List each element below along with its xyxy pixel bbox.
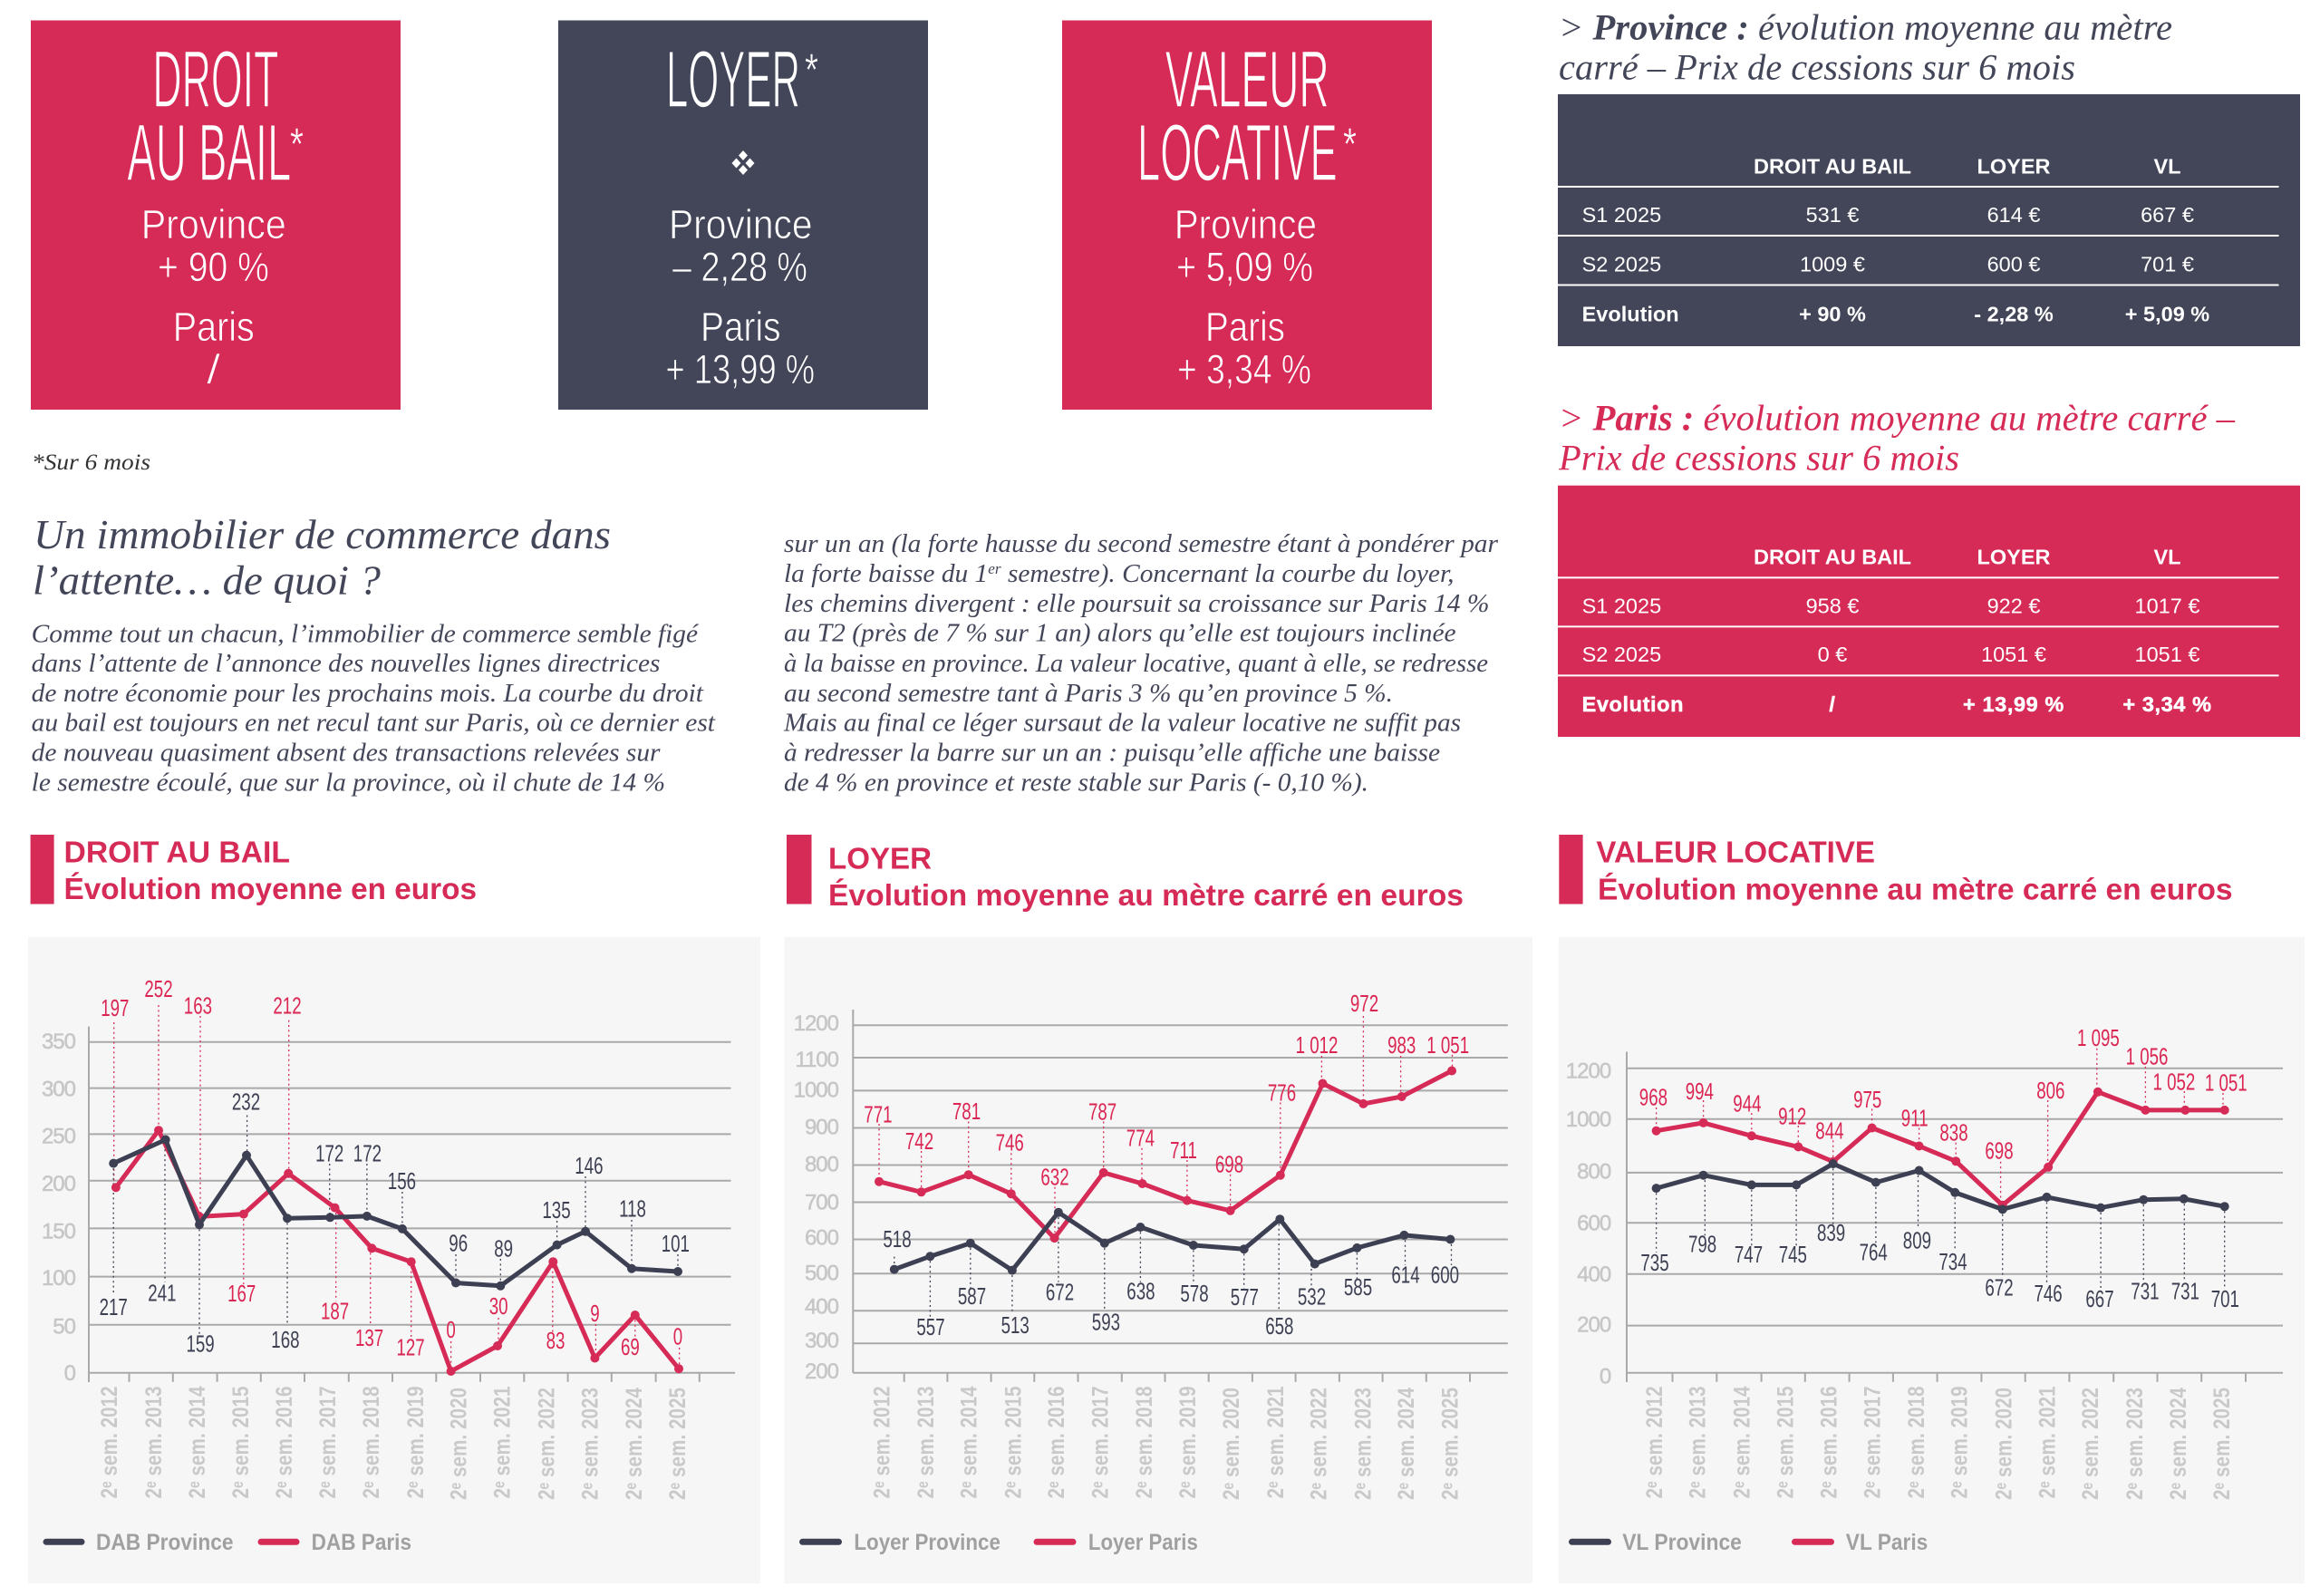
x axis labels: 2ᵉ sem. 2013 (1686, 1387, 1711, 1499)
table: paris: 1017 € (2135, 595, 2199, 618)
heading: province table: > Province : évolution moyenne au mètre (1559, 6, 2172, 47)
table: paris: 922 € (1987, 595, 2040, 618)
table: paris: + 3,34 % (2122, 692, 2212, 716)
table: province: 701 € (2141, 253, 2194, 276)
line series: province (894, 1213, 1450, 1271)
x axis labels: 2ᵉ sem. 2020 (1219, 1388, 1244, 1500)
section heading: droit au bail (31, 835, 477, 905)
section heading: droit au bail: Évolution moyenne en euros (63, 872, 477, 905)
data labels: province: 513 (1001, 1311, 1030, 1339)
card: loyer: Paris (701, 304, 781, 350)
data labels: province: 241 (148, 1279, 177, 1306)
table: paris: / (1829, 692, 1836, 716)
axes and ticks (89, 1027, 735, 1382)
data labels: paris: 0 (446, 1316, 456, 1343)
data labels: paris: 771 (864, 1100, 893, 1127)
x axis labels (1642, 1386, 2235, 1500)
line series: paris (116, 1130, 679, 1371)
data labels: paris (101, 975, 682, 1360)
x axis labels: 2ᵉ sem. 2019 (403, 1387, 429, 1499)
data labels: paris: 806 (2036, 1077, 2064, 1104)
data labels: province: 600 (1431, 1261, 1459, 1288)
leader lines: paris (1657, 1049, 2223, 1205)
card: valeur locative: + 5,09 % (1176, 244, 1313, 290)
legend: DAB Paris (312, 1530, 411, 1555)
x axis labels: 2ᵉ sem. 2015 (1000, 1386, 1026, 1499)
section heading: loyer: Évolution moyenne au mètre carré en euros (828, 878, 1464, 912)
table: province: LOYER (1977, 155, 2050, 179)
y axis labels: 200 (805, 1359, 839, 1384)
data labels: province: 118 (619, 1195, 646, 1222)
data labels: paris: 698 (1985, 1137, 2014, 1164)
x axis labels: 2ᵉ sem. 2022 (1307, 1388, 1332, 1500)
data labels: province: 101 (662, 1230, 690, 1257)
y axis labels: 700 (805, 1190, 839, 1214)
x axis labels: 2ᵉ sem. 2016 (1816, 1387, 1842, 1499)
data labels: province: 672 (1046, 1279, 1074, 1305)
data labels: paris: 983 (1387, 1031, 1416, 1059)
x axis labels (870, 1386, 1463, 1500)
y axis labels: 300 (805, 1329, 839, 1353)
y axis labels: 600 (805, 1226, 839, 1251)
data labels: province: 587 (958, 1282, 986, 1310)
data labels: province: 798 (1688, 1230, 1716, 1257)
card: droit au bail (31, 20, 401, 410)
y axis labels (42, 1030, 76, 1386)
legend (1571, 1530, 1928, 1555)
x axis labels: 2ᵉ sem. 2017 (1088, 1387, 1113, 1499)
data labels: province: 532 (1298, 1282, 1326, 1310)
table: province: 667 € (2141, 203, 2194, 227)
data labels: province: 735 (1640, 1249, 1669, 1276)
data labels: province: 89 (494, 1234, 513, 1262)
data labels: province: 146 (575, 1152, 604, 1179)
table: paris: 958 € (1806, 595, 1859, 618)
data labels: paris: 127 (396, 1333, 425, 1360)
heading: province table (1559, 6, 2172, 87)
table: province: + 5,09 % (2125, 303, 2209, 326)
table: province: - 2,28 % (1974, 303, 2054, 326)
card: droit au bail: DROIT (152, 34, 278, 124)
data labels: province: 168 (271, 1326, 300, 1353)
heading: paris table (1558, 397, 2236, 479)
data labels: paris: 911 (1901, 1104, 1928, 1131)
data labels: province: 172 (315, 1140, 343, 1166)
card: droit au bail: * (290, 119, 304, 169)
x axis labels: 2ᵉ sem. 2021 (1263, 1386, 1289, 1499)
data labels: province: 764 (1860, 1238, 1888, 1265)
data labels: province: 557 (916, 1313, 945, 1340)
data labels: paris: 212 (273, 991, 302, 1019)
data labels: province: 809 (1903, 1226, 1931, 1253)
data labels: paris: 187 (321, 1297, 349, 1324)
y axis labels: 350 (42, 1030, 76, 1054)
y axis labels: 200 (1577, 1313, 1611, 1338)
chart: loyer (785, 937, 1532, 1583)
table: province: VL (2153, 155, 2181, 179)
article text: left column: au bail est toujours en net recul tant sur Paris, où ce dernier est (32, 709, 716, 738)
y axis labels: 1000 (1566, 1108, 1611, 1132)
data labels: paris: 163 (184, 991, 212, 1019)
table: province: 614 € (1987, 203, 2040, 227)
article text: right column: de 4 % en province et reste stable sur Paris (- 0,10 %). (784, 768, 1368, 797)
y axis labels: 0 (64, 1361, 76, 1386)
table: paris: DROIT AU BAIL (1754, 546, 1911, 569)
line series: province (1657, 1164, 2225, 1209)
leader lines: province (113, 1115, 678, 1335)
article text: left column: Comme tout un chacun, l’immobilier de commerce semble figé (32, 619, 699, 648)
footnote: *Sur 6 mois (32, 450, 150, 475)
data labels: province: 731 (2131, 1278, 2160, 1304)
axes and ticks (853, 1010, 1508, 1382)
data labels: paris: 0 (673, 1322, 682, 1349)
axes and ticks (1627, 1051, 2283, 1382)
y axis labels: 600 (1577, 1212, 1611, 1236)
data labels: paris: 1 052 (2152, 1068, 2195, 1095)
legend: VL Province (1622, 1530, 1742, 1555)
x axis labels: 2ᵉ sem. 2020 (1991, 1388, 2016, 1500)
data labels: province (1640, 1219, 2239, 1312)
data labels: paris: 975 (1853, 1086, 1881, 1113)
data labels: province: 96 (449, 1229, 468, 1256)
article text: left column: le semestre écoulé, que sur la province, où il chute de 14 % (32, 768, 665, 797)
y axis labels: 500 (805, 1261, 839, 1285)
card: droit au bail: Province (141, 201, 286, 247)
heading: paris table: > Paris : évolution moyenne au mètre carré – (1559, 397, 2236, 439)
card: droit au bail: Paris (173, 304, 255, 350)
table: paris: 1051 € (2135, 643, 2199, 666)
x axis labels: 2ᵉ sem. 2019 (1175, 1387, 1201, 1499)
y axis labels: 200 (42, 1172, 76, 1196)
table: province: + 90 % (1799, 303, 1866, 326)
x axis labels: 2ᵉ sem. 2018 (1904, 1386, 1929, 1499)
heading: province table: carré – Prix de cessions sur 6 mois (1559, 46, 2075, 87)
y axis labels: 800 (805, 1153, 839, 1176)
x axis labels: 2ᵉ sem. 2025 (2209, 1388, 2235, 1500)
x axis labels: 2ᵉ sem. 2012 (870, 1387, 895, 1499)
x axis labels: 2ᵉ sem. 2022 (2078, 1388, 2103, 1500)
table: province (1558, 94, 2300, 346)
data labels: paris: 83 (546, 1327, 565, 1354)
data labels: paris: 632 (1040, 1163, 1069, 1190)
data labels: paris: 698 (1215, 1150, 1243, 1177)
line series: paris (1657, 1092, 2225, 1205)
data labels: province: 577 (1231, 1283, 1259, 1311)
data labels: paris: 69 (621, 1333, 640, 1360)
x axis labels: 2ᵉ sem. 2018 (359, 1386, 384, 1499)
y axis labels: 1200 (1566, 1059, 1611, 1083)
data labels: province (883, 1225, 1459, 1340)
data labels: paris: 912 (1778, 1102, 1806, 1129)
article text: right column: à la baisse en province. La valeur locative, quant à elle, se redresse (784, 649, 1488, 678)
x axis labels: 2ᵉ sem. 2019 (1947, 1387, 1972, 1499)
data labels: province: 839 (1817, 1219, 1845, 1246)
section heading: valeur locative: VALEUR LOCATIVE (1596, 836, 1875, 869)
y axis labels: 800 (1577, 1159, 1611, 1184)
data labels: province: 672 (1985, 1273, 2014, 1301)
x axis labels: 2ᵉ sem. 2015 (1774, 1386, 1799, 1499)
table: paris: + 13,99 % (1963, 692, 2064, 716)
x axis labels: 2ᵉ sem. 2018 (1132, 1386, 1157, 1499)
article text: right column (783, 529, 1499, 797)
data labels: paris: 776 (1268, 1079, 1296, 1106)
data labels: province: 172 (353, 1140, 382, 1166)
x axis labels: 2ᵉ sem. 2023 (2122, 1388, 2148, 1500)
card: valeur locative (1062, 20, 1432, 410)
data labels: paris (864, 990, 1469, 1190)
table: paris: 1051 € (1981, 643, 2046, 666)
data labels: province: 614 (1391, 1261, 1420, 1288)
article text: right column: au second semestre tant à Paris 3 % qu’en province 5 %. (784, 679, 1393, 708)
article text: right column: sur un an (la forte hausse du second semestre étant à pondérer par (784, 529, 1499, 558)
x axis labels: 2ᵉ sem. 2014 (185, 1386, 210, 1499)
y axis labels (794, 1011, 839, 1384)
data labels: province: 747 (1735, 1241, 1763, 1268)
data labels: province: 734 (1938, 1248, 1967, 1275)
data labels: province: 232 (232, 1088, 260, 1115)
legend (46, 1530, 411, 1555)
table: province: DROIT AU BAIL (1754, 155, 1911, 179)
y axis labels: 0 (1600, 1365, 1611, 1388)
section heading: loyer (787, 835, 1464, 912)
section heading: droit au bail: DROIT AU BAIL (63, 836, 290, 869)
table: province: 600 € (1987, 253, 2040, 276)
y axis labels: 1100 (795, 1048, 839, 1072)
table: province: S1 2025 (1582, 203, 1661, 227)
x axis labels: 2ᵉ sem. 2025 (665, 1388, 691, 1500)
article text: left column: de notre économie pour les prochains mois. La courbe du droit (32, 679, 704, 708)
table: province: Evolution (1582, 303, 1679, 326)
card: droit au bail: AU BAIL (127, 107, 291, 198)
data labels: paris: 972 (1350, 990, 1378, 1017)
heading: paris table: Prix de cessions sur 6 mois (1558, 437, 1959, 479)
y axis labels: 400 (805, 1295, 839, 1320)
card: loyer: * (805, 44, 818, 95)
article text: right column: les chemins divergent : elle poursuit sa croissance sur Paris 14 % (784, 589, 1490, 618)
legend: Loyer Province (854, 1530, 1000, 1555)
article title (33, 511, 611, 604)
leader lines: paris (879, 1016, 1452, 1238)
leader lines: paris (114, 1005, 680, 1371)
y axis labels: 250 (42, 1125, 76, 1149)
data labels: province: 667 (2085, 1285, 2114, 1312)
article text: right column: la forte baisse du 1 (784, 559, 985, 588)
card: loyer (558, 20, 928, 410)
data labels: paris: 1 051 (2205, 1069, 2248, 1096)
x axis labels: 2ᵉ sem. 2023 (1350, 1388, 1376, 1500)
x axis labels: 2ᵉ sem. 2025 (1437, 1388, 1463, 1500)
data labels: paris: 252 (144, 975, 173, 1002)
x axis labels: 2ᵉ sem. 2013 (914, 1387, 939, 1499)
data labels: province: 746 (2034, 1280, 2063, 1307)
data labels: paris: 968 (1639, 1084, 1668, 1110)
data labels: paris: 838 (1939, 1118, 1968, 1146)
data labels: paris: 787 (1088, 1098, 1116, 1125)
section heading: loyer: LOYER (828, 841, 932, 875)
data labels: paris: 167 (227, 1280, 256, 1307)
leader lines: province (1657, 1164, 2225, 1291)
table: paris: Evolution (1582, 692, 1684, 716)
x axis labels: 2ᵉ sem. 2021 (2035, 1386, 2061, 1499)
x axis labels: 2ᵉ sem. 2023 (577, 1388, 603, 1500)
x axis labels: 2ᵉ sem. 2012 (97, 1387, 122, 1499)
x axis labels: 2ᵉ sem. 2024 (622, 1388, 647, 1500)
x axis labels: 2ᵉ sem. 2024 (1394, 1388, 1419, 1500)
table: paris (1558, 486, 2300, 737)
card: droit au bail: / (207, 346, 221, 392)
data labels: province: 701 (2211, 1285, 2239, 1312)
x axis labels: 2ᵉ sem. 2012 (1642, 1387, 1668, 1499)
x axis labels: 2ᵉ sem. 2014 (1729, 1386, 1754, 1499)
data labels: province: 518 (883, 1225, 912, 1253)
article text: right column: semestre). Concernant la courbe du loyer, (1001, 559, 1455, 588)
article text: left column: dans l’attente de l’annonce des nouvelles lignes directrices (32, 649, 660, 678)
data labels: paris: 781 (952, 1098, 981, 1125)
table: paris: S1 2025 (1582, 595, 1661, 618)
x axis labels: 2ᵉ sem. 2017 (1861, 1387, 1886, 1499)
table: province: 531 € (1806, 203, 1859, 227)
chart: valeur locative (1559, 937, 2305, 1583)
data labels: paris: 30 (489, 1292, 508, 1320)
card: valeur locative: * (1343, 119, 1357, 169)
card: valeur locative: Paris (1205, 304, 1285, 350)
data labels: paris: 746 (996, 1128, 1024, 1156)
legend: Loyer Paris (1088, 1530, 1198, 1555)
data labels: paris: 994 (1686, 1078, 1714, 1105)
x axis labels: 2ᵉ sem. 2024 (2166, 1388, 2191, 1500)
article text: left column: de nouveau quasiment absent des transactions relevées sur (32, 738, 661, 767)
x axis labels: 2ᵉ sem. 2020 (447, 1388, 472, 1500)
x axis labels: 2ᵉ sem. 2016 (272, 1387, 297, 1499)
data labels: province: 638 (1126, 1277, 1155, 1304)
table: province: S2 2025 (1582, 253, 1661, 276)
table: paris: S2 2025 (1582, 643, 1661, 666)
x axis labels: 2ᵉ sem. 2014 (957, 1386, 982, 1499)
data labels: paris: 197 (101, 994, 129, 1021)
data labels: paris: 844 (1815, 1117, 1844, 1144)
data labels: paris: 9 (590, 1300, 600, 1327)
x axis labels: 2ᵉ sem. 2015 (228, 1386, 254, 1499)
y axis labels: 900 (805, 1115, 839, 1140)
article text: right column: à redresser la barre sur un an : puisqu’elle affiche une baisse (784, 738, 1440, 767)
card: loyer: Province (669, 201, 812, 247)
icon: ornament diamonds (732, 150, 754, 175)
data labels: province (100, 1088, 690, 1357)
card: valeur locative: Province (1174, 201, 1317, 247)
data labels: paris: 1 056 (2126, 1042, 2168, 1069)
x axis labels: 2ᵉ sem. 2013 (141, 1387, 167, 1499)
data labels: province: 745 (1779, 1241, 1807, 1268)
data labels: paris: 774 (1126, 1124, 1155, 1151)
section heading: valeur locative (1559, 835, 2233, 906)
data labels: province: 731 (2171, 1278, 2199, 1304)
x axis labels: 2ᵉ sem. 2016 (1044, 1387, 1069, 1499)
y axis labels: 50 (53, 1314, 76, 1340)
data labels: paris: 137 (355, 1324, 383, 1351)
x axis labels: 2ᵉ sem. 2021 (489, 1386, 515, 1499)
article text: left column (32, 619, 716, 797)
data labels: paris: 1 095 (2077, 1024, 2120, 1051)
data labels: province: 135 (542, 1196, 571, 1224)
article text: right column: Mais au final ce léger sursaut de la valeur locative ne suffit pas (783, 709, 1461, 738)
table: paris: 0 € (1818, 643, 1847, 666)
x axis labels: 2ᵉ sem. 2022 (535, 1388, 560, 1500)
data labels: paris (1639, 1024, 2248, 1164)
article title: l’attente… de quoi ? (33, 557, 381, 604)
line series: province (113, 1140, 678, 1286)
data labels: paris: 711 (1170, 1137, 1197, 1164)
x axis labels (97, 1386, 691, 1500)
chart: droit au bail (28, 937, 760, 1583)
table: paris: VL (2153, 546, 2181, 569)
card: droit au bail: + 90 % (158, 244, 269, 290)
legend (803, 1530, 1198, 1555)
data labels: paris: 944 (1733, 1090, 1762, 1117)
y axis labels: 150 (42, 1220, 76, 1244)
card: valeur locative: + 3,34 % (1177, 346, 1311, 392)
card: loyer: + 13,99 % (665, 346, 815, 392)
y axis labels: 1000 (794, 1078, 839, 1102)
article text: right column: au T2 (près de 7 % sur 1 an) alors qu’elle est toujours inclinée (784, 619, 1456, 648)
data labels: province: 217 (100, 1293, 128, 1320)
article text: right column: er (988, 560, 1001, 577)
card: loyer: LOYER (666, 34, 800, 124)
line series: paris (879, 1071, 1452, 1238)
data labels: paris: 1 012 (1296, 1031, 1338, 1059)
card: loyer: – 2,28 % (672, 244, 807, 290)
legend: VL Paris (1846, 1530, 1928, 1555)
card: valeur locative: VALEUR (1165, 34, 1329, 124)
data labels: province: 156 (388, 1167, 416, 1195)
data labels: province: 578 (1180, 1280, 1209, 1307)
y axis labels (1566, 1059, 1611, 1388)
y axis labels: 300 (42, 1077, 76, 1102)
table: province: 1009 € (1800, 253, 1865, 276)
data labels: province: 159 (186, 1330, 215, 1357)
data labels: paris: 1 051 (1426, 1031, 1469, 1059)
y axis labels: 1200 (794, 1011, 839, 1036)
article title: Un immobilier de commerce dans (34, 511, 611, 557)
leader lines: province (894, 1213, 1452, 1317)
y axis labels: 400 (1577, 1262, 1611, 1287)
table: paris: LOYER (1977, 546, 2050, 569)
data labels: paris: 742 (905, 1127, 933, 1155)
data labels: province: 585 (1344, 1273, 1372, 1301)
section heading: valeur locative: Évolution moyenne au mètre carré en euros (1598, 873, 2233, 906)
y axis labels: 100 (42, 1266, 76, 1291)
card: valeur locative: LOCATIVE (1137, 107, 1338, 198)
data labels: province: 593 (1092, 1308, 1120, 1335)
data labels: province: 658 (1265, 1312, 1293, 1340)
x axis labels: 2ᵉ sem. 2017 (315, 1387, 341, 1499)
legend: DAB Province (96, 1530, 234, 1555)
